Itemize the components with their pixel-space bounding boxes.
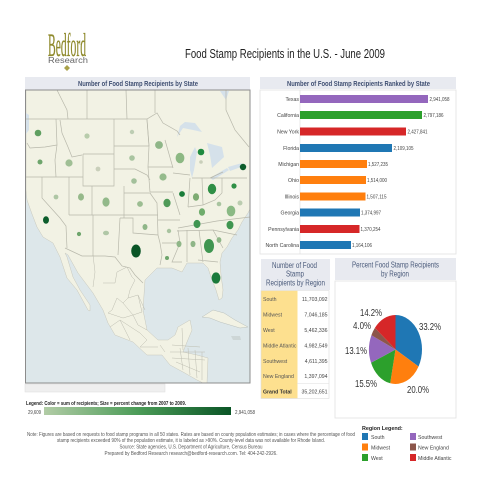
panel: region table [261,259,330,398]
bar labels: states: Florida [283,146,299,152]
map scrollbar [25,384,165,392]
region legend title: Region Legend: [362,426,403,432]
bar labels: values [352,97,450,249]
table body: Middle Atlantic [263,344,297,350]
footnote: stamp recipients exceeded 90% of the population estimate, it is labeled as >90%. County-level data was not available for Rhode Island. [57,438,325,444]
title: Food Stamp Recipients in the U.S. - June 2009 [185,47,385,61]
footnote [27,432,355,457]
pie heading [335,258,456,280]
Cuba and islands [202,310,248,340]
region legend [362,426,452,462]
region legend labels: Midwest [371,446,391,452]
bar labels: values: 2,797,186 [424,113,444,119]
recipient circles by state [35,130,246,284]
bar labels: values: 1,507,115 [366,194,387,200]
map: North America [26,90,250,383]
table body: South [263,297,277,303]
bar labels: states: Pennsylvania [268,227,299,233]
table body: West [263,328,275,334]
table body: Southwest [263,359,288,365]
table body: 11,703,092 [302,297,328,303]
pie labels: 14.2% [360,308,382,319]
pie labels: 20.0% [407,385,429,396]
bar chart heading [260,77,456,89]
table body: 7,046,185 [304,312,328,318]
bar labels: values: 2,941,058 [430,97,450,103]
table body: Midwest [263,312,283,318]
pie heading: by Region [381,270,409,278]
logo: Bedford Research [48,28,88,71]
footnote: Source: State agencies, U.S. Department of Agriculture, Census Bureau [120,444,262,450]
footnote: Prepared by Bedford Research research@bedford-research.com. Tel: 404-242-2926. [104,451,278,457]
legend caption: Legend: Color = sum of recipients; Size = percent change from 2007 to 2009. [26,401,186,407]
bar labels: states: Georgia [281,210,299,216]
Mexico and Central America borders [93,255,205,380]
region legend swatches [362,433,416,461]
legend maximum: 2,941,058 [235,410,255,416]
bar labels: states: Michigan [278,162,299,168]
legend minimum: 29,609 [28,410,41,416]
table body: 5,462,336 [304,328,328,334]
text: Bedford [48,28,86,64]
panel: ranked bar chart [260,77,456,254]
bar chart heading: Number of Food Stamp Recipients Ranked by State [287,81,430,88]
pie heading: Percent Food Stamp Recipients [352,260,439,270]
state borders [26,90,250,283]
region legend labels: New England [418,446,449,452]
logo: Bedford Research: Research [48,56,88,65]
footnote: Note: Figures are based on requests to food stamp programs in all 50 states. Rates are based on county population estimates; in cases where the percentage of food [27,432,355,438]
map heading: Number of Food Stamp Recipients by State [78,81,198,88]
region legend labels: Southwest [418,435,443,441]
bar labels: values: 2,109,105 [394,146,414,152]
pie labels: 13.1% [345,346,367,357]
table body: 4,611,395 [305,359,328,365]
table body: Grand Total [263,390,292,396]
table heading: Recipients by Region [266,278,325,288]
pie [369,315,422,384]
table heading: Stamp [286,270,304,278]
panel: pie chart [335,258,456,418]
bar labels: states: Illinois [285,194,299,200]
legend gradient bar [44,407,231,415]
bar labels: states: North Carolina [266,243,299,249]
color legend [26,401,255,416]
bar labels: states: Texas [285,97,299,103]
table heading: Number of Food [272,261,317,270]
map frame [26,90,250,383]
pie labels: 4.0% [353,321,371,332]
table body: 4,982,549 [304,344,328,350]
pie labels: 33.2% [419,322,441,333]
bar labels: states [266,97,299,249]
table body: 35,202,651 [302,390,328,396]
bar labels: values: 1,164,106 [352,243,372,249]
bar labels: values: 1,527,235 [368,162,388,168]
table body: New England [263,374,294,380]
bar labels: values: 1,374,997 [361,210,381,216]
region legend labels: West [371,456,383,462]
Great Lakes [26,91,242,180]
bar labels: values: 1,370,254 [360,227,381,233]
map heading [25,77,250,90]
bar labels: values: 2,427,841 [408,130,428,136]
bar labels: states: New York [277,130,299,136]
region legend labels [371,435,452,462]
bar labels: values: 1,514,000 [367,178,387,184]
bar chart [300,95,428,249]
table body: 1,397,094 [304,374,328,380]
pie labels: 15.5% [355,379,377,390]
region legend labels: Middle Atlantic [418,456,452,462]
table body [261,290,329,398]
table heading [261,259,330,290]
panel: map [25,77,250,392]
bar labels: states: Ohio [288,178,299,184]
region legend labels: South [371,435,385,441]
bar labels: states: California [277,113,299,119]
pie labels [345,308,441,396]
